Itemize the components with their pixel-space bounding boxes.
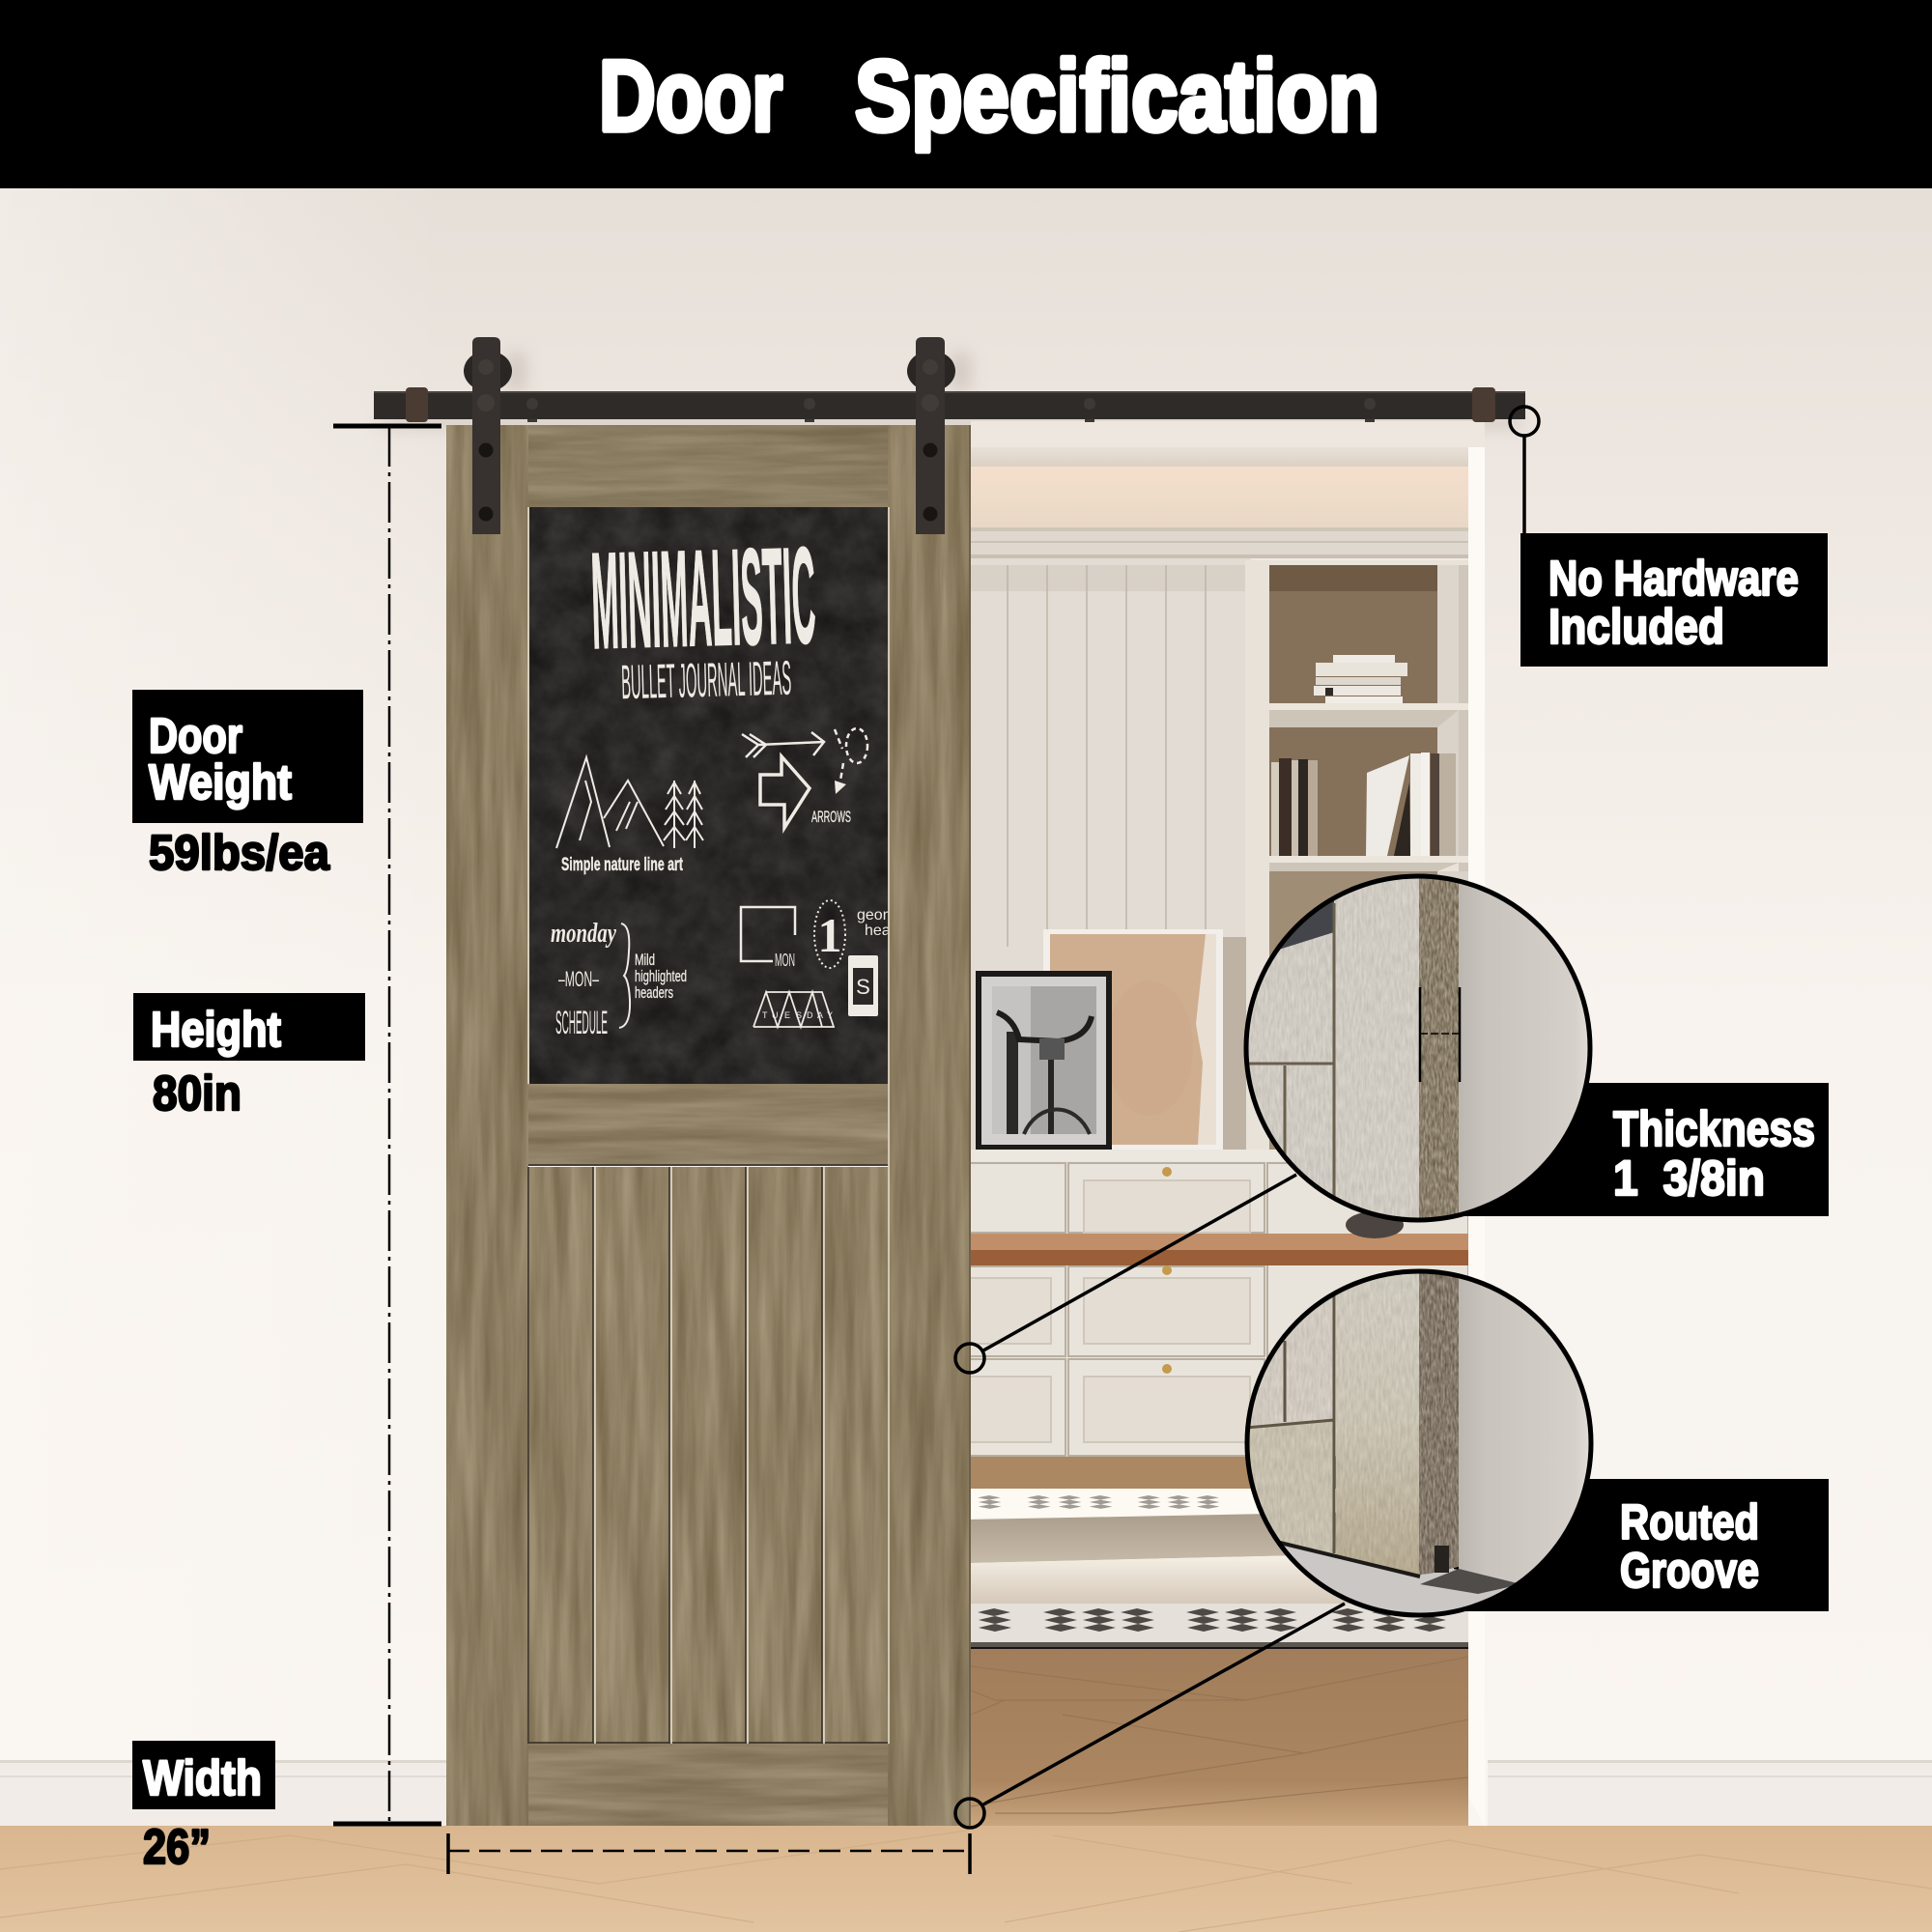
thickness marks <box>1420 987 1460 1082</box>
ceiling reveal <box>971 447 1468 467</box>
chalk highlighted headers note <box>635 951 687 1002</box>
chalk nature caption: Simple nature line art <box>561 855 683 875</box>
upright books <box>1271 753 1456 856</box>
label: thickness text <box>1613 1101 1815 1206</box>
chalkboard: BULLET JOURNAL IDEAS <box>620 651 792 709</box>
chalk geometric note <box>857 907 924 939</box>
track shadow on wall <box>382 353 1521 427</box>
chalk mountains <box>556 757 703 848</box>
panel joints <box>528 1165 888 1744</box>
label: thickness text: 1 3/8in <box>1613 1151 1765 1206</box>
label: thickness text: Thickness <box>1613 1101 1815 1156</box>
drawer fronts <box>966 1163 1468 1457</box>
dark rug pattern <box>978 1608 1446 1632</box>
baseboard left <box>0 1760 446 1826</box>
track stops <box>406 387 428 422</box>
label: height <box>133 993 365 1061</box>
chalk tuesday flags <box>753 992 834 1027</box>
ceiling glow <box>971 467 1468 527</box>
chalkboard: SCHEDULE <box>555 1005 608 1041</box>
label: routed groove text: Groove <box>1620 1543 1759 1598</box>
right hanger <box>907 337 955 534</box>
rug <box>971 1489 1468 1649</box>
cabinet <box>966 1150 1468 1464</box>
bookcase <box>1245 560 1468 1164</box>
title: Door <box>599 41 782 153</box>
label: routed groove text <box>1620 1494 1759 1598</box>
chalk monday: monday <box>551 919 616 949</box>
wood shelf <box>971 1234 1468 1265</box>
beige art print <box>1043 929 1246 1151</box>
title: Specification <box>855 41 1379 153</box>
lower plank panels <box>529 1167 888 1744</box>
callout leader: hardware <box>1510 407 1539 533</box>
label: height: Height <box>151 1002 281 1057</box>
zoom circle: routed groove detail <box>1241 1265 1604 1623</box>
value: height: 80in <box>153 1065 242 1121</box>
middle rail <box>528 1084 888 1166</box>
chalk geometric note: geometric <box>857 907 924 923</box>
label: no hardware: No Hardware <box>1548 551 1799 606</box>
chalk arrows <box>742 728 867 828</box>
chalk highlighted headers note: highlighted <box>635 967 687 985</box>
zoom circle: thickness detail <box>1236 869 1604 1227</box>
chalk header box label: MON <box>775 951 795 970</box>
callout leader: routed groove <box>955 1604 1345 1828</box>
label: no hardware: Included <box>1548 599 1724 654</box>
shelves <box>1459 703 1468 710</box>
rail bolts <box>526 398 1376 422</box>
chalk header box <box>741 907 795 961</box>
chalkboard <box>529 507 924 1084</box>
chalk number one <box>814 900 845 968</box>
width dimension line <box>448 1833 970 1874</box>
left stile <box>446 425 528 1826</box>
speaker <box>1346 1211 1404 1238</box>
door jamb <box>971 421 1488 1831</box>
title bar <box>0 0 1932 188</box>
chalk brace <box>619 923 630 1028</box>
panelled wall <box>971 558 1251 1167</box>
label: no hardware <box>1520 533 1828 667</box>
label: routed groove text: Routed <box>1620 1494 1759 1549</box>
value: door weight: 59lbs/ea <box>149 825 330 880</box>
chalk mon: –MON– <box>558 967 599 991</box>
callout leader: thickness <box>955 1175 1296 1373</box>
chalk arrows caption: ARROWS <box>811 808 851 826</box>
circle outline <box>1246 876 1590 1220</box>
label: width: Width <box>143 1750 262 1805</box>
recessed drawer panels <box>966 1180 1250 1442</box>
baseboard right <box>1488 1760 1932 1826</box>
label: door weight <box>132 690 363 823</box>
bottom rail <box>528 1744 888 1826</box>
knobs <box>1162 1167 1172 1374</box>
faint rug pattern <box>978 1495 1219 1509</box>
doorway room scene <box>966 447 1468 1826</box>
right stile <box>888 425 971 1826</box>
label box: routed groove <box>1454 1479 1829 1611</box>
chalk highlighted headers note: Mild <box>635 951 655 969</box>
rail bar <box>374 391 1525 419</box>
chalk number one: 1 <box>817 908 842 962</box>
circle outline <box>1247 1271 1591 1615</box>
height dimension line <box>333 426 441 1824</box>
door <box>446 425 971 1826</box>
label box: thickness <box>1454 1083 1829 1216</box>
crown moulding <box>971 527 1468 558</box>
chalk S tile <box>848 955 878 1016</box>
value: width: 26” <box>143 1819 211 1874</box>
infographic canvas: MINIMALISTIC <box>589 519 817 678</box>
bicycle photo <box>976 971 1112 1151</box>
door edge shade <box>969 425 971 1826</box>
left hanger <box>464 337 512 534</box>
title <box>599 41 1379 153</box>
room floor behind rug <box>971 1457 1336 1489</box>
chalk highlighted headers note: headers <box>635 983 673 1002</box>
chalk S tile: S <box>856 975 870 999</box>
chalk arrowhead <box>835 781 846 794</box>
chalk tuesday flags: TUESDAY <box>762 1010 833 1020</box>
barn door track <box>374 337 1525 534</box>
room floor <box>971 1649 1468 1826</box>
label: door weight: Door <box>149 708 242 763</box>
label: door weight: Weight <box>149 754 292 810</box>
joint highlights <box>528 507 889 1744</box>
floor <box>0 1826 1932 1932</box>
top rail <box>528 425 888 507</box>
stacked books <box>1314 655 1407 703</box>
chalk geometric note: headers <box>865 923 921 939</box>
